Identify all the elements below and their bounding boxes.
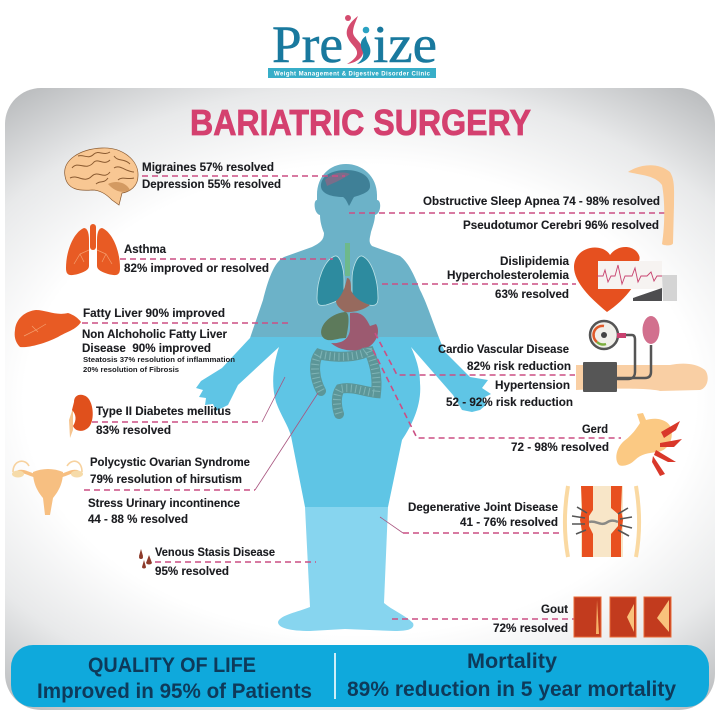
banner: quality of life value: Improved in 95% of Patients <box>37 680 312 703</box>
label: stress incontinence: Stress Urinary incontinence <box>88 498 240 510</box>
logo wordmark: ize <box>373 16 437 74</box>
icon: kidney <box>69 395 93 438</box>
label: migraines: Migraines 57% resolved <box>142 162 274 174</box>
organ: intestine <box>315 348 377 414</box>
icon: arm <box>628 165 674 245</box>
connector lines <box>82 176 665 619</box>
organ: body lungs <box>317 256 378 305</box>
right labels <box>408 196 660 635</box>
label: hypercholesterolemia: Hypercholesterolemia <box>447 270 570 282</box>
label: depression: Depression 55% resolved <box>142 179 281 191</box>
label: fibrosis: 20% resolution of Fibrosis <box>83 365 179 374</box>
icon: knee joint <box>565 486 639 557</box>
icon: uterus <box>12 461 83 515</box>
logo tagline bar: Weight Management & Digestive Disorder Clinic <box>274 72 431 78</box>
organ: trachea <box>345 243 350 276</box>
bottom banner <box>11 645 709 707</box>
logo tagline bar <box>268 68 436 78</box>
label: PCOS: Polycystic Ovarian Syndrome <box>90 457 250 469</box>
icon: brain <box>65 148 138 205</box>
label: gout: Gout <box>541 604 568 616</box>
label: venous stasis: Venous Stasis Disease <box>155 547 275 559</box>
title: BARIATRIC SURGERY <box>190 102 531 143</box>
organ: body brain <box>321 170 370 206</box>
organ: body stomach <box>331 313 378 351</box>
label: cardio vascular value: 82% risk reduction <box>467 361 571 373</box>
logo wordmark: Pre <box>272 16 343 74</box>
left labels <box>82 162 281 578</box>
icon: heart with ECG <box>574 247 677 312</box>
label: NAFLD line 1: Non Alchoholic Fatty Liver <box>82 329 228 341</box>
label: dislipidemia value: 63% resolved <box>495 289 569 301</box>
label: asthma value: 82% improved or resolved <box>124 263 269 275</box>
label: sleep apnea: Obstructive Sleep Apnea 74 - 98% resolved <box>423 196 660 208</box>
body silhouette <box>196 164 491 631</box>
label: gout value: 72% resolved <box>493 623 568 635</box>
label: joint disease value: 41 - 76% resolved <box>460 517 558 529</box>
label: venous stasis value: 95% resolved <box>155 566 229 578</box>
label: cardio vascular: Cardio Vascular Disease <box>438 344 569 356</box>
banner: mortality heading: Mortality <box>467 650 557 673</box>
logo wordmark <box>272 15 437 74</box>
label: dislipidemia: Dislipidemia <box>500 256 570 268</box>
icon: blood pressure monitor <box>576 316 708 392</box>
label: gerd: Gerd <box>582 424 608 436</box>
icon: blood drops <box>139 549 152 568</box>
label: steatosis: Steatosis 37% resolution of inflammation <box>83 355 235 364</box>
organ: body liver <box>321 312 349 340</box>
label: gerd value: 72 - 98% resolved <box>511 442 609 454</box>
label: hypertension value: 52 - 92% risk reduction <box>446 397 573 409</box>
icon: liver <box>15 310 81 347</box>
internal organs <box>315 170 378 414</box>
label: joint disease: Degenerative Joint Disease <box>408 502 558 514</box>
icon: lungs <box>66 224 120 275</box>
label: diabetes value: 83% resolved <box>96 425 171 437</box>
icon: stomach <box>616 413 682 476</box>
logo <box>268 15 437 78</box>
label: pseudotumor: Pseudotumor Cerebri 96% resolved <box>463 220 659 232</box>
label: fatty liver: Fatty Liver 90% improved <box>83 308 225 320</box>
icon: gout tiles <box>574 597 671 637</box>
organ: body heart <box>336 278 370 312</box>
label: PCOS value: 79% resolution of hirsutism <box>90 474 242 486</box>
label: diabetes: Type II Diabetes mellitus <box>96 406 231 418</box>
label: stress incontinence value: 44 - 88 % resolved <box>88 514 188 526</box>
label: asthma: Asthma <box>124 244 167 256</box>
banner: mortality value: 89% reduction in 5 year mortality <box>347 678 676 701</box>
banner: quality of life heading: QUALITY OF LIFE <box>88 654 256 677</box>
label: hypertension: Hypertension <box>495 380 570 392</box>
label: NAFLD line 2: Disease 90% improved <box>82 343 211 355</box>
